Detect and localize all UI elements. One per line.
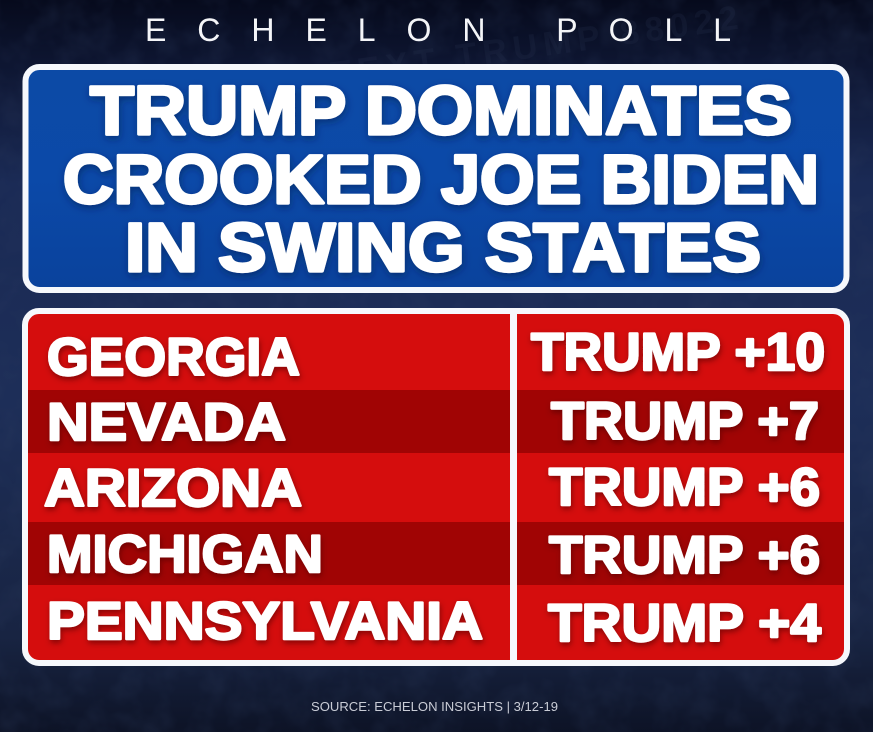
poll margins: TRUMP +6 xyxy=(549,458,820,517)
headline text: TRUMP DOMINATES xyxy=(90,72,792,149)
background: TEXT TRUMP 88022 xyxy=(328,0,746,94)
panel: headline xyxy=(26,67,846,290)
table background xyxy=(25,311,847,663)
source line: SOURCE: ECHELON INSIGHTS | 3/12-19 xyxy=(311,699,558,714)
poll margins: TRUMP +6 xyxy=(549,526,820,585)
poll margins xyxy=(531,323,825,653)
state names xyxy=(44,328,483,651)
heading: Echelon Poll: ECHELON POLL xyxy=(145,12,731,48)
state names: PENNSYLVANIA xyxy=(47,592,483,651)
column divider xyxy=(510,311,517,663)
panel: results table xyxy=(25,311,847,663)
headline text: IN SWING STATES xyxy=(125,209,761,286)
poll margins: TRUMP +4 xyxy=(548,594,822,653)
headline text xyxy=(63,72,819,286)
state names: GEORGIA xyxy=(47,328,300,387)
poll margins: TRUMP +10 xyxy=(531,323,825,382)
state names: NEVADA xyxy=(47,393,286,452)
state names: ARIZONA xyxy=(44,459,302,518)
poll margins: TRUMP +7 xyxy=(551,392,819,451)
state names: MICHIGAN xyxy=(47,525,323,584)
headline text: CROOKED JOE BIDEN xyxy=(63,141,819,218)
alternating row bands xyxy=(28,390,844,585)
headline box xyxy=(26,67,846,290)
